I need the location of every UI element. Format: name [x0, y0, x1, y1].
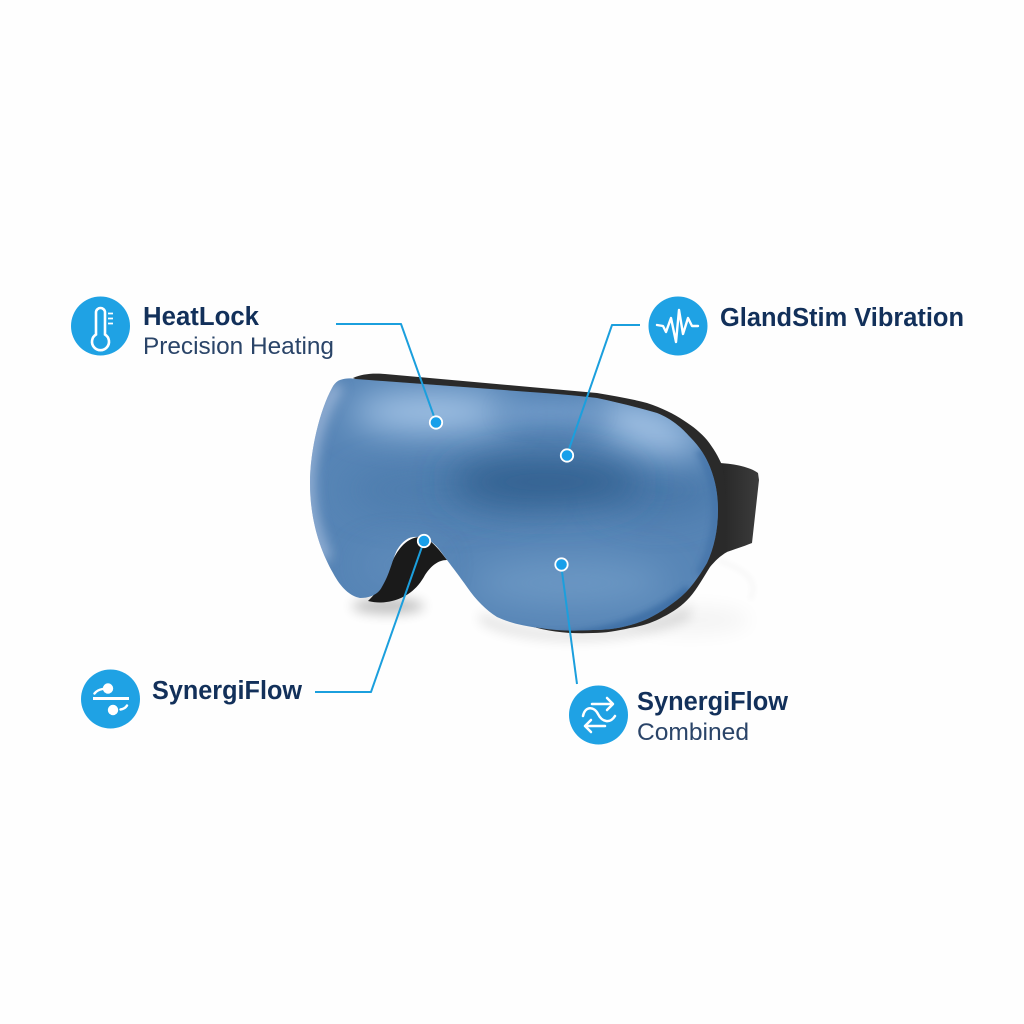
- nose padding: [368, 537, 447, 602]
- marker: vibration point: [561, 449, 573, 462]
- heading: GlandStim Vibration: GlandStim Vibration: [720, 304, 964, 332]
- infographic canvas: [71, 296, 962, 744]
- strap: [720, 463, 759, 553]
- marker: heat point: [430, 416, 442, 429]
- text: Precision Heating: Precision Heating: [143, 333, 334, 360]
- blue lens: [310, 378, 718, 631]
- callout lines: [315, 324, 640, 692]
- heading: SynergiFlow: SynergiFlow: [152, 677, 302, 705]
- heading: SynergiFlow: SynergiFlow: [637, 688, 788, 716]
- lens shading: [413, 484, 441, 496]
- text: Combined: Combined: [637, 719, 749, 746]
- icon: thermometer: [71, 296, 130, 356]
- marker: lower point: [555, 558, 568, 571]
- callout: SynergiFlow Combined: [569, 686, 788, 746]
- callout: HeatLock: [71, 296, 334, 360]
- icon: flow: [81, 670, 140, 728]
- ground shadow: [352, 560, 753, 640]
- heading: HeatLock: HeatLock: [143, 303, 260, 331]
- marker: nose point: [418, 535, 430, 547]
- callout: GlandStim Vibration: [648, 296, 964, 356]
- callout: SynergiFlow left: [81, 670, 302, 728]
- dark frame: [353, 374, 727, 633]
- product: eye mask: [300, 365, 759, 640]
- icon: waveform: [648, 296, 708, 356]
- icon: swap arrows: [569, 686, 628, 744]
